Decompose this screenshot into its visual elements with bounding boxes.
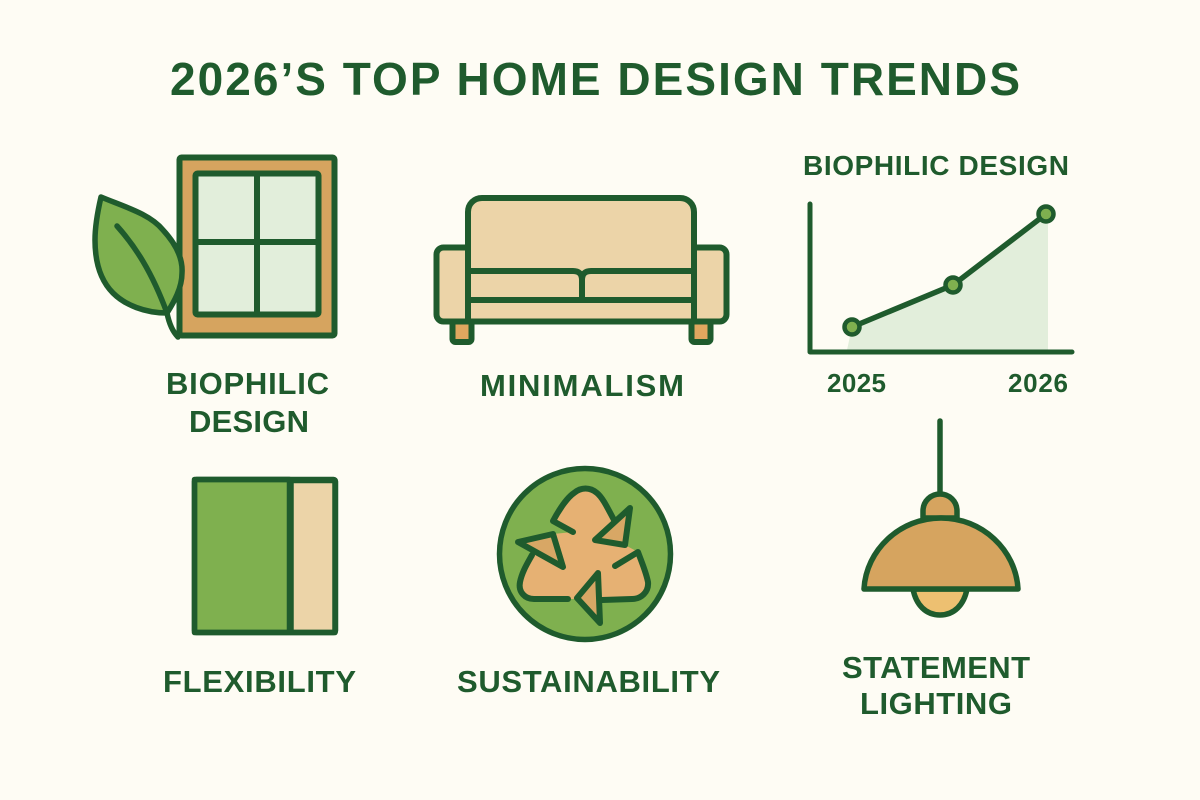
title: 2026’S TOP HOME DESIGN TRENDS xyxy=(170,53,1020,105)
axis label: 2026: 2026 xyxy=(1008,368,1068,398)
icon: window xyxy=(180,158,334,336)
icon: sofa xyxy=(436,198,726,342)
label: biophilic design: DESIGN xyxy=(189,404,309,439)
panel: sustainability xyxy=(457,468,720,699)
line chart xyxy=(810,204,1072,352)
label: sustainability: SUSTAINABILITY xyxy=(457,664,720,699)
panel: biophilic design xyxy=(95,158,334,439)
label: statement lighting: LIGHTING xyxy=(860,686,1012,721)
label: biophilic design: BIOPHILIC xyxy=(166,366,329,401)
chart title: BIOPHILIC DESIGN xyxy=(803,150,1069,181)
panel: flexibility xyxy=(163,480,356,699)
icon: recycling symbol xyxy=(500,468,670,640)
label: flexibility: FLEXIBILITY xyxy=(163,664,356,699)
icon: pendant lamp xyxy=(864,421,1018,615)
label: statement lighting xyxy=(842,650,1030,721)
label: minimalism: MINIMALISM xyxy=(480,368,684,403)
label: biophilic design xyxy=(166,366,329,439)
panel: biophilic design trend chart xyxy=(803,150,1072,398)
label: statement lighting: STATEMENT xyxy=(842,650,1030,685)
panel: statement lighting xyxy=(842,421,1030,721)
icon: leaf xyxy=(95,197,182,337)
panel: minimalism xyxy=(436,198,726,403)
icon: flexible partition xyxy=(194,480,336,632)
axis label: 2025: 2025 xyxy=(827,368,886,398)
